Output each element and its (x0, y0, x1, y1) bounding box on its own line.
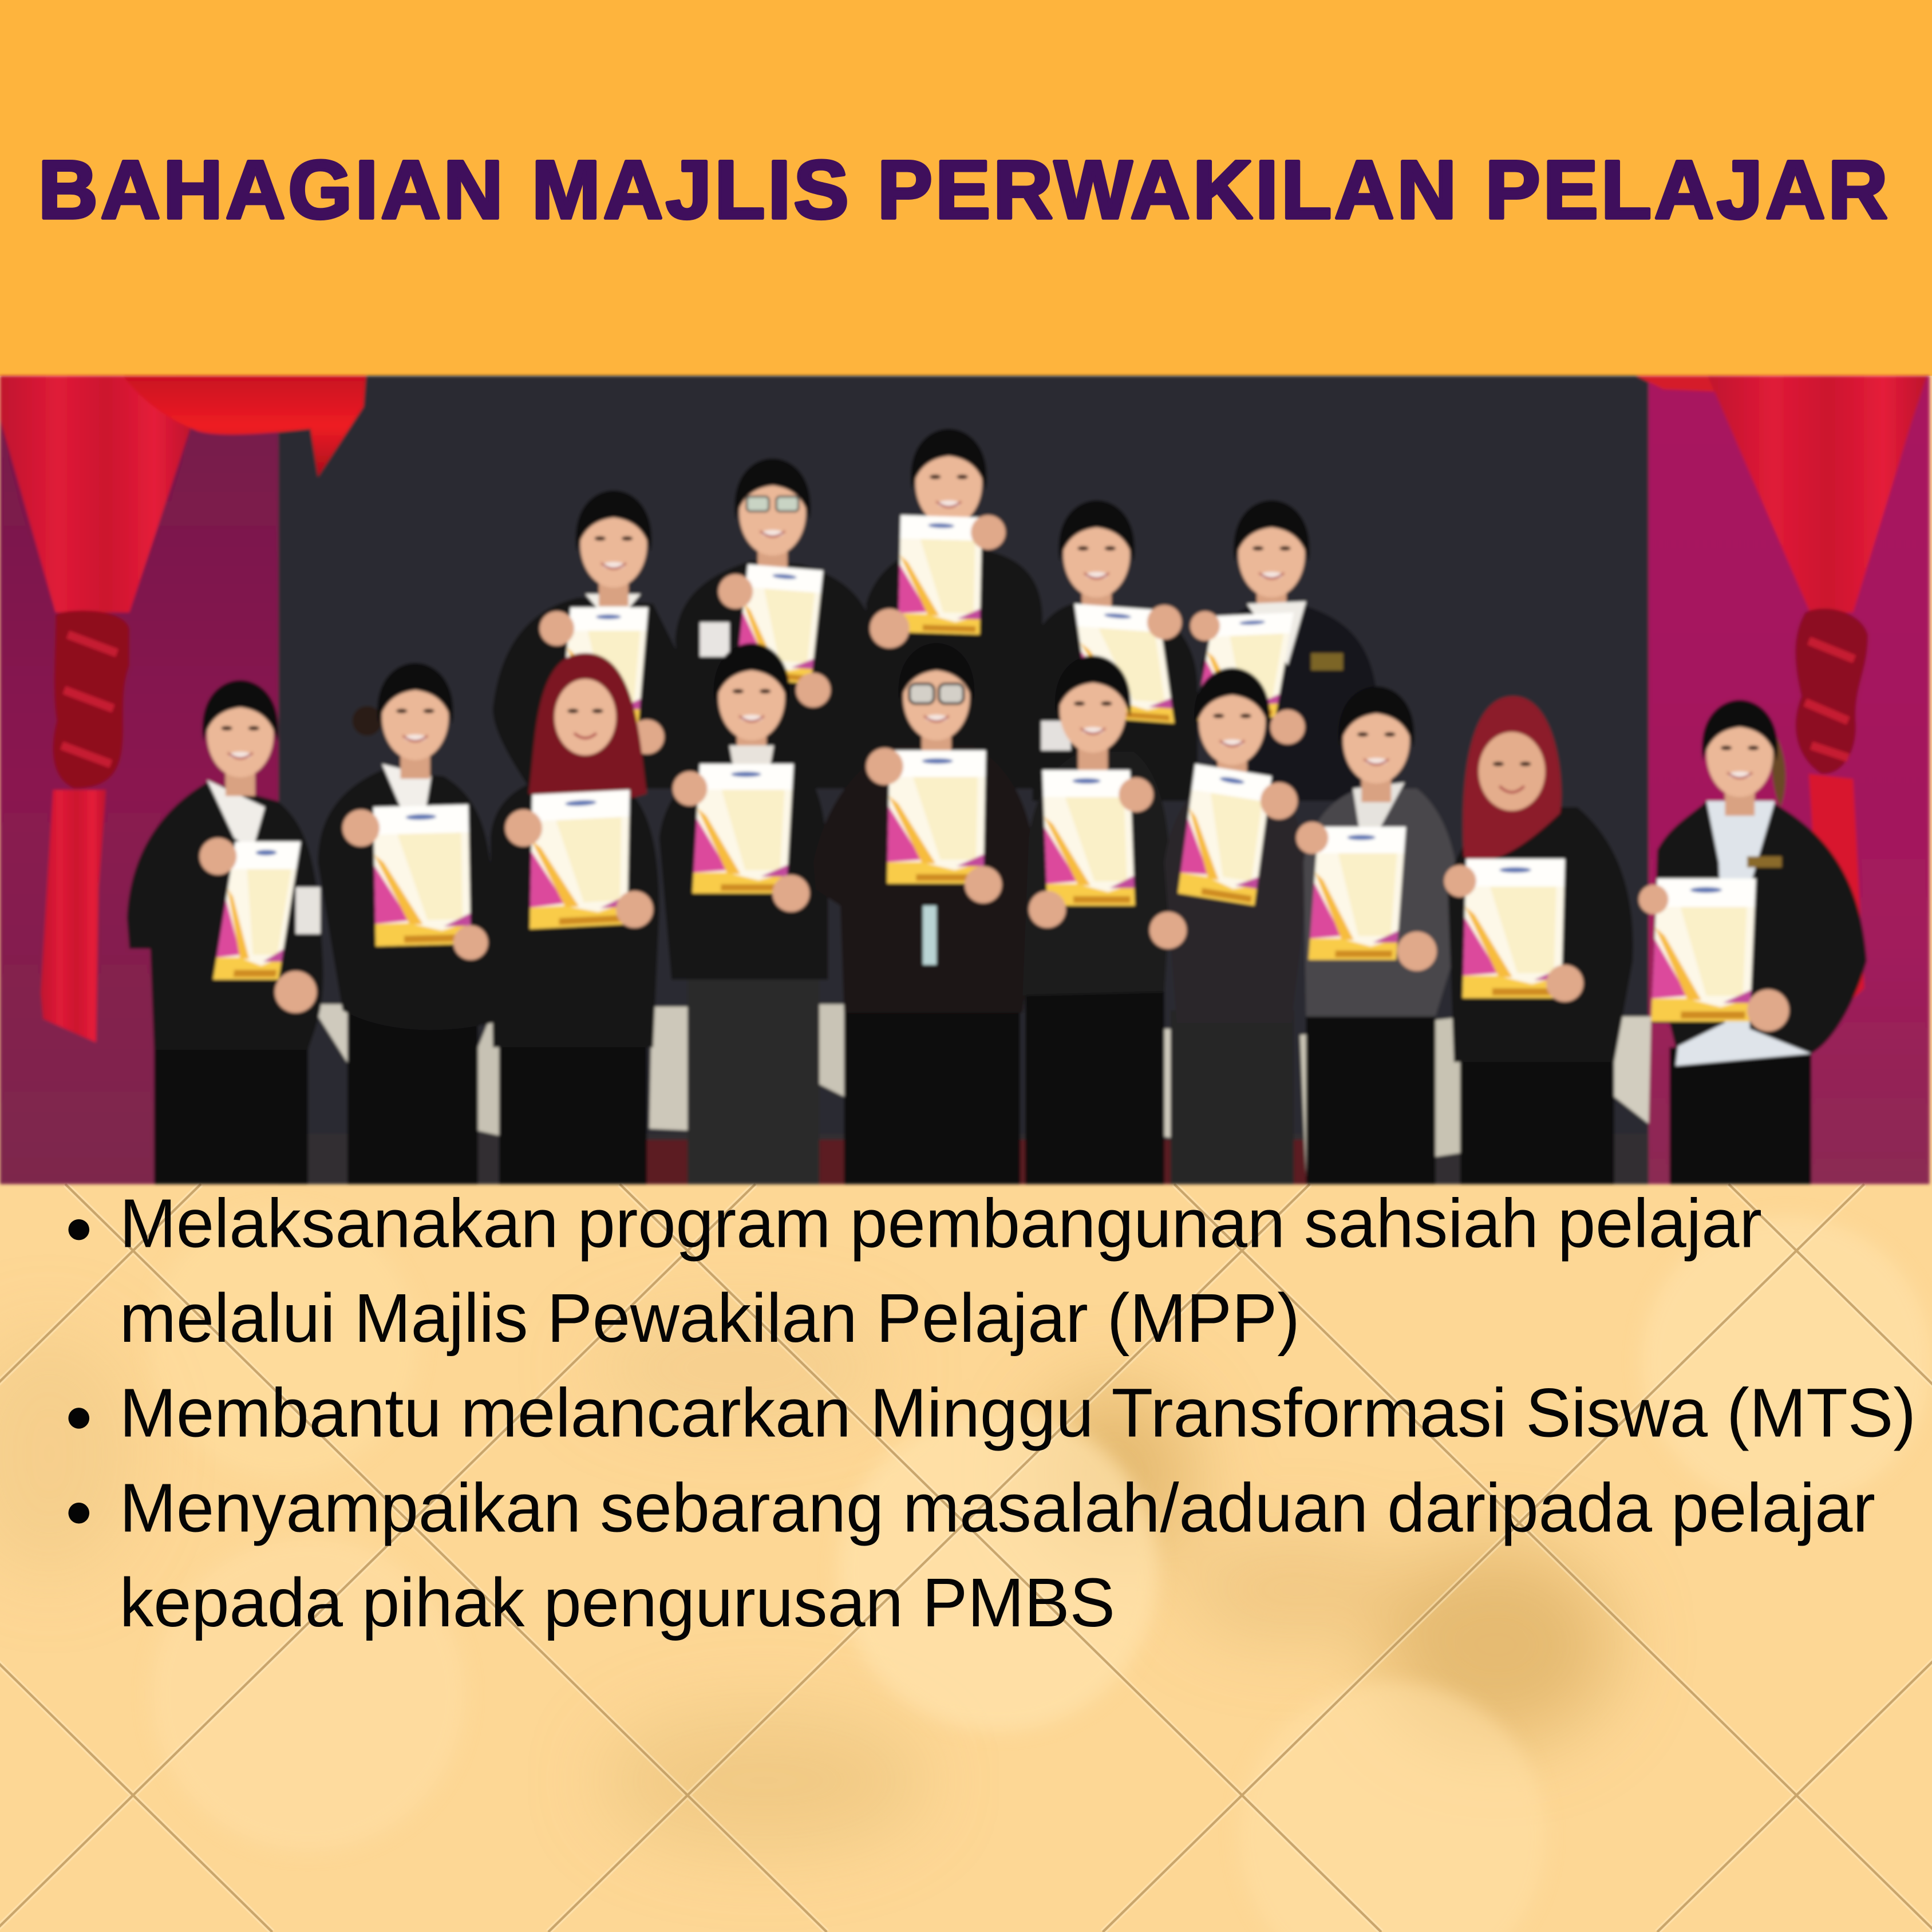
student: back row 5 (1190, 500, 1377, 801)
student: front row 7 (1149, 668, 1307, 1184)
group photograph (0, 376, 1930, 1184)
bullet 3: Menyampaikan sebarang masalah/aduan daripada pelajar (120, 1469, 1875, 1546)
bullet 3 (68, 1469, 1875, 1641)
title banner (0, 0, 1932, 376)
student: front row 5 (813, 643, 1037, 1184)
title: BAHAGIAN MAJLIS PERWAKILAN PELAJAR (38, 143, 1888, 236)
stage backdrop (0, 376, 1930, 1184)
student: front row 8 (1296, 686, 1460, 1184)
student: front row 3 (491, 653, 659, 1184)
right curtain (1636, 376, 1927, 1025)
student: front row 4 (659, 643, 828, 1184)
student: front row 6 (1023, 655, 1171, 1184)
bullet list (68, 1184, 1916, 1641)
student: back row 4 (1033, 500, 1198, 801)
student: front row 1 (127, 680, 323, 1184)
bullet 1: melalui Majlis Pewakilan Pelajar (MPP) (120, 1279, 1300, 1357)
lower patterned background (0, 1183, 1932, 1932)
student: back row 3 (866, 429, 1042, 789)
bullet 2: Membantu melancarkan Minggu Transformasi Siswa (MTS) (120, 1374, 1916, 1452)
bullet 3: kepada pihak pengurusan PMBS (120, 1564, 1115, 1641)
bullet 1: Melaksanakan program pembangunan sahsiah pelajar (120, 1184, 1762, 1262)
student: front row 2 (318, 663, 493, 1184)
student: front row 10 (1639, 700, 1867, 1184)
student: back row 2 (675, 459, 878, 789)
student: back row 1 (493, 491, 696, 789)
left curtain (0, 376, 366, 1042)
student: front row 9 (1444, 696, 1633, 1184)
bullet 1 (68, 1184, 1762, 1357)
